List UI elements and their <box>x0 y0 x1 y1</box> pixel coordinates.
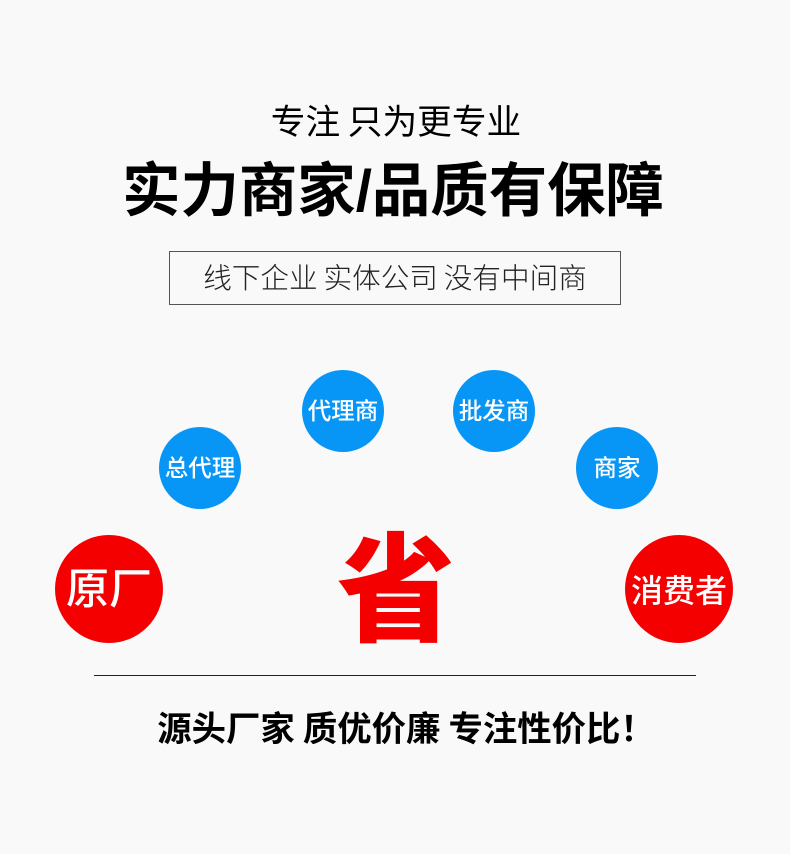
large red character: 省 <box>337 526 455 658</box>
circle: 批发商 <box>453 370 535 452</box>
circle: 总代理: 总代理 <box>165 455 235 481</box>
divider line <box>94 675 696 676</box>
circle: 代理商 <box>302 370 384 452</box>
subtitle heading: 专注 只为更专业 <box>271 104 521 142</box>
circle: 商家 <box>576 427 658 509</box>
circle: 商家: 商家 <box>594 455 640 481</box>
circle: 批发商: 批发商 <box>459 398 529 424</box>
circle: 原厂: 原厂 <box>66 566 152 614</box>
main title: 实力商家/品质有保障 <box>122 159 664 224</box>
circle: 消费者: 消费者 <box>631 573 727 609</box>
circle: 原厂 <box>55 535 163 643</box>
boxed tagline <box>169 251 621 305</box>
circle: 总代理 <box>159 427 241 509</box>
bottom slogan: 源头厂家 质优价廉 专注性价比！ <box>157 711 655 749</box>
circle: 消费者 <box>625 535 733 643</box>
boxed tagline: 线下企业 实体公司 没有中间商 <box>203 263 587 295</box>
circle: 代理商: 代理商 <box>308 398 378 424</box>
